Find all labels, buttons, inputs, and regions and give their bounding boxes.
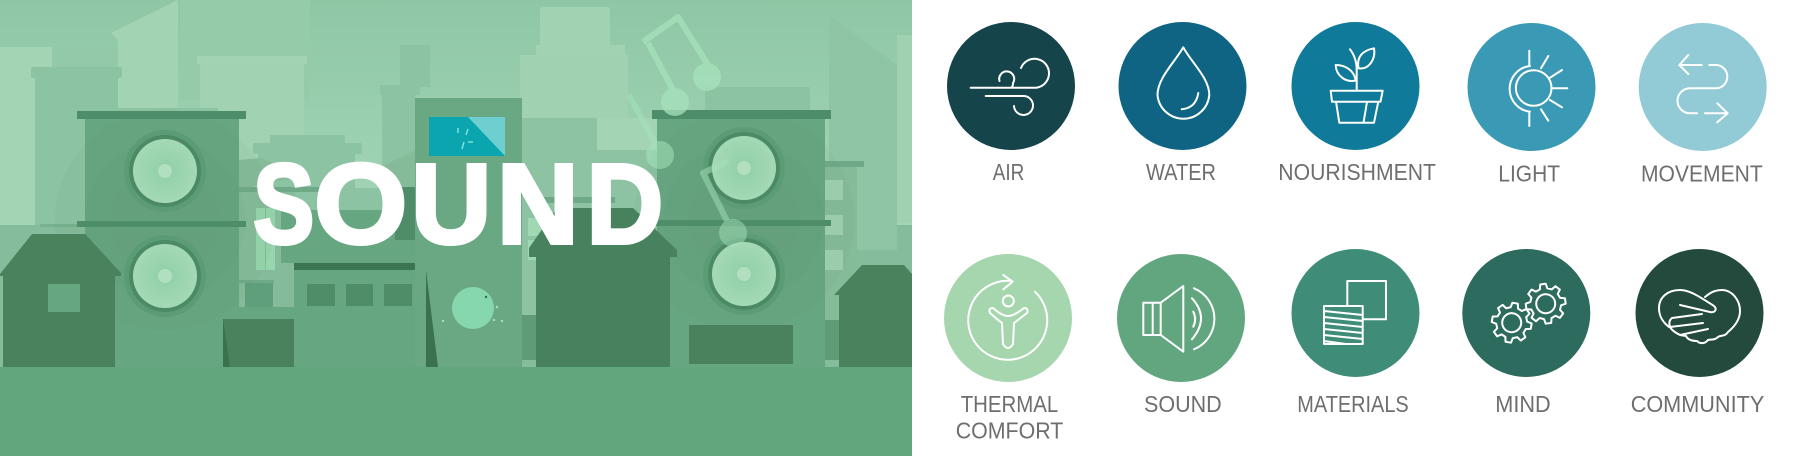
label: movement: MOVEMENT xyxy=(1641,161,1763,187)
small dark box xyxy=(223,319,294,367)
volume dial xyxy=(442,287,503,329)
left speaker tower xyxy=(40,110,275,367)
right speaker tower xyxy=(634,110,854,367)
label: sound: SOUND xyxy=(1144,391,1222,417)
ground xyxy=(0,367,912,456)
label: mind: MIND xyxy=(1495,391,1551,417)
icon: movement xyxy=(1639,23,1767,151)
central tower with screen and dial xyxy=(415,98,522,367)
icon: community xyxy=(1636,249,1764,377)
icon: air xyxy=(947,22,1075,150)
label: community: COMMUNITY xyxy=(1631,391,1764,417)
label: thermal comfort: COMFORT xyxy=(956,418,1063,444)
icon: light xyxy=(1468,23,1596,151)
icon: mind xyxy=(1462,249,1590,377)
screen with music notes xyxy=(429,117,505,156)
icon: water xyxy=(1118,22,1246,150)
background skyline right of the tower xyxy=(520,7,912,360)
label: thermal comfort xyxy=(956,391,1063,444)
label: light: LIGHT xyxy=(1498,161,1560,187)
label: thermal comfort: THERMAL xyxy=(961,391,1058,417)
title: SOUND: N xyxy=(497,141,579,267)
icon: thermal comfort xyxy=(944,254,1072,382)
panel: sound city illustration xyxy=(0,0,912,456)
background skyline left xyxy=(0,0,310,225)
icon: materials xyxy=(1292,249,1420,377)
title: SOUND xyxy=(253,141,663,267)
music note: small left xyxy=(630,97,674,169)
label: water: WATER xyxy=(1146,159,1216,185)
title: SOUND: U xyxy=(411,141,491,267)
title: SOUND: O xyxy=(314,141,407,267)
music note: over right speaker xyxy=(703,162,747,247)
music note: large double note xyxy=(643,17,721,116)
title: SOUND: S xyxy=(253,141,314,267)
title: SOUND: D xyxy=(587,141,663,267)
background skyline centre xyxy=(239,45,430,367)
left house xyxy=(0,234,121,367)
low building with windows xyxy=(294,263,426,367)
icon: sound xyxy=(1117,254,1245,382)
label: air: AIR xyxy=(993,159,1024,185)
label: materials: MATERIALS xyxy=(1297,391,1409,417)
right house xyxy=(834,265,912,369)
label: nourishment: NOURISHMENT xyxy=(1278,159,1436,185)
panel: white background for concept grid xyxy=(912,0,1800,456)
centre house xyxy=(529,208,677,367)
icon: nourishment xyxy=(1292,22,1420,150)
